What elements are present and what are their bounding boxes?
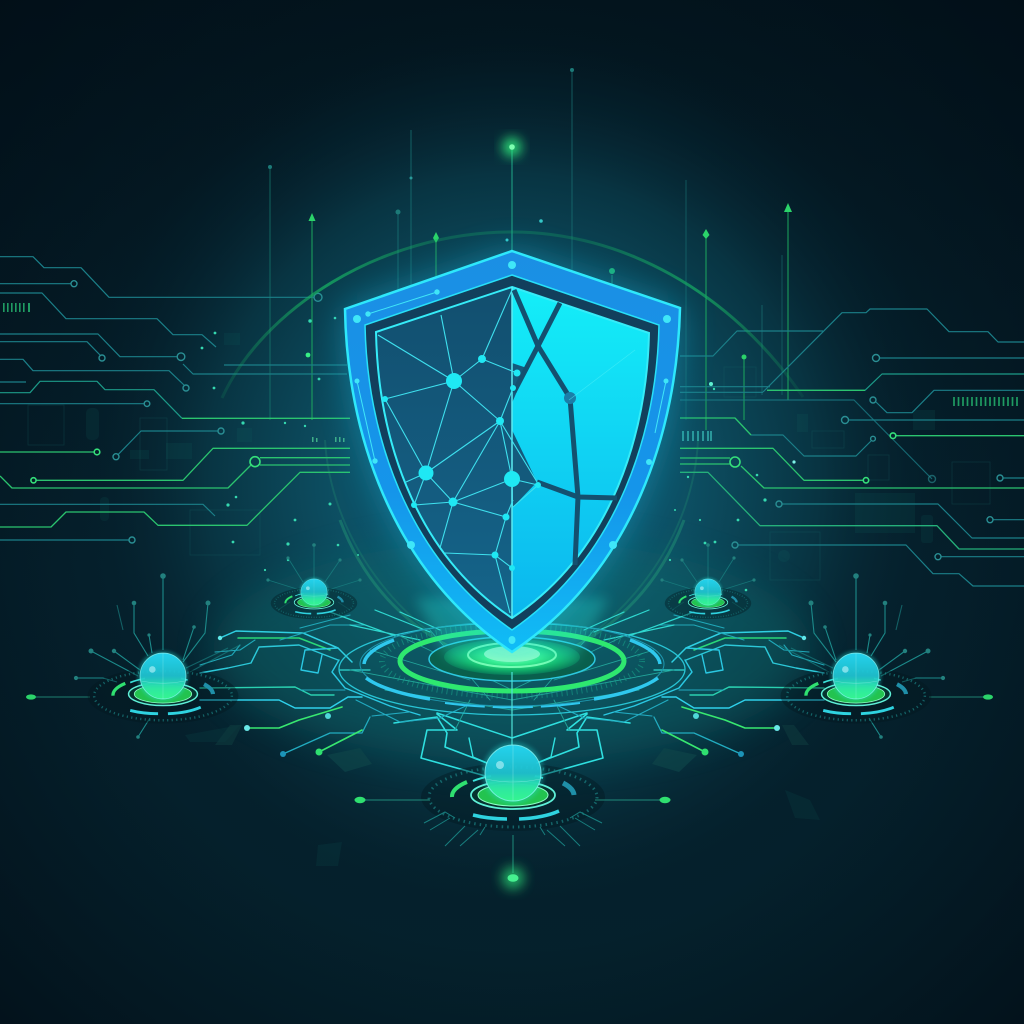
orb rays: small right <box>660 543 756 610</box>
bottom orb circuit feet <box>424 812 602 846</box>
frame rivets <box>353 261 671 644</box>
shield glow <box>345 251 680 652</box>
orb: small left <box>271 577 357 619</box>
central hologram platform <box>339 622 685 745</box>
shield dark band <box>365 275 659 630</box>
network nodes <box>382 355 541 571</box>
base circuit: right half <box>512 610 824 777</box>
shield outer frame <box>345 251 680 652</box>
line-end markers <box>268 68 792 360</box>
shield left data panel <box>376 287 512 618</box>
light beam under shield <box>415 598 609 660</box>
left circuit traces <box>0 257 350 543</box>
left panel network <box>378 290 635 613</box>
bottom orb connectors <box>354 797 670 889</box>
faint data blocks <box>86 333 935 866</box>
right panel cracks <box>514 290 617 565</box>
orb: bottom center <box>421 742 605 831</box>
faint outline blocks <box>28 367 990 580</box>
right barcode tick marks <box>683 397 1017 441</box>
orb rays: right <box>779 573 993 739</box>
orb: left <box>88 651 238 724</box>
green arc behind shield <box>222 232 803 398</box>
shield <box>345 251 680 652</box>
orb rays: left <box>26 573 240 739</box>
shield right panel <box>512 287 649 618</box>
orb: small right <box>665 577 751 619</box>
shield halo ring <box>325 440 698 680</box>
left barcode tick marks <box>3 303 344 442</box>
shield panel outline <box>376 287 649 618</box>
orb rays: small left <box>266 543 362 610</box>
right circuit traces <box>680 309 1024 586</box>
shield center seam <box>511 287 513 618</box>
vertical signal lines <box>270 70 788 430</box>
base circuit: left half <box>200 610 512 777</box>
orb: right <box>781 651 931 724</box>
dark wedges crossing seam <box>512 363 537 507</box>
scattered particles <box>201 317 796 591</box>
